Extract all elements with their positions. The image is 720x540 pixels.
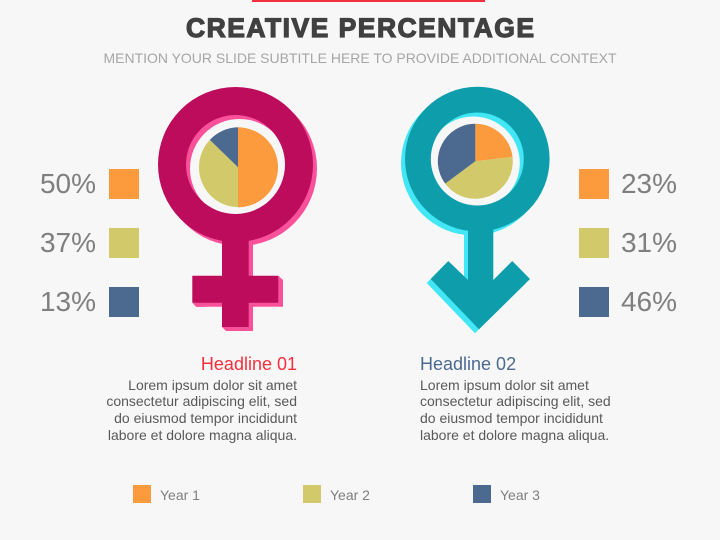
pie chart: female (199, 127, 278, 207)
body text right: do eiusmod tempor incididunt (420, 410, 603, 426)
text block: headline 01 (106, 354, 297, 443)
body text left: Lorem ipsum dolor sit amet (128, 377, 297, 393)
right swatch blue (579, 287, 609, 317)
body text right: consectetur adipiscing elit, sed (420, 393, 611, 409)
right swatch yellow (579, 228, 609, 258)
left percentages and swatches (40, 168, 139, 317)
right percentages and swatches (579, 168, 677, 317)
female symbol body (158, 87, 313, 327)
right value 23%: 23% (621, 168, 677, 199)
subtitle: MENTION YOUR SLIDE SUBTITLE HERE TO PROVIDE ADDITIONAL CONTEXT (104, 50, 617, 66)
right value 31%: 31% (621, 227, 677, 258)
legend swatch year 1 (133, 485, 151, 503)
body text right: labore et dolore magna aliqua. (420, 427, 609, 443)
text block: headline 02 (420, 354, 611, 443)
legend label year 2: Year 2 (330, 487, 370, 503)
left swatch yellow (109, 228, 139, 258)
right value 46%: 46% (621, 286, 677, 317)
legend (133, 485, 540, 503)
body text left: do eiusmod tempor incididunt (114, 410, 297, 426)
right swatch orange (579, 169, 609, 199)
body text right (420, 377, 611, 443)
icon: male symbol with pie chart (401, 87, 550, 333)
legend label year 1: Year 1 (160, 487, 200, 503)
pie chart: male (438, 124, 513, 199)
male symbol shadow (401, 91, 546, 333)
title: CREATIVE PERCENTAGE (186, 13, 534, 43)
left swatch orange (109, 169, 139, 199)
icon: female symbol with pie chart (158, 87, 317, 331)
body text left: labore et dolore magna aliqua. (108, 427, 297, 443)
top accent bar (252, 0, 485, 2)
legend swatch year 3 (473, 485, 491, 503)
left value 37%: 37% (40, 227, 96, 258)
left value 50%: 50% (40, 168, 96, 199)
left value 13%: 13% (40, 286, 96, 317)
body text left (106, 377, 297, 443)
female symbol shadow (162, 91, 317, 331)
body text right: Lorem ipsum dolor sit amet (420, 377, 589, 393)
legend swatch year 2 (303, 485, 321, 503)
male symbol body (405, 87, 550, 329)
legend label year 3: Year 3 (500, 487, 540, 503)
heading: headline 02: Headline 02 (420, 354, 516, 374)
left swatch blue (109, 287, 139, 317)
heading: headline 01: Headline 01 (201, 354, 297, 374)
body text left: consectetur adipiscing elit, sed (106, 393, 297, 409)
